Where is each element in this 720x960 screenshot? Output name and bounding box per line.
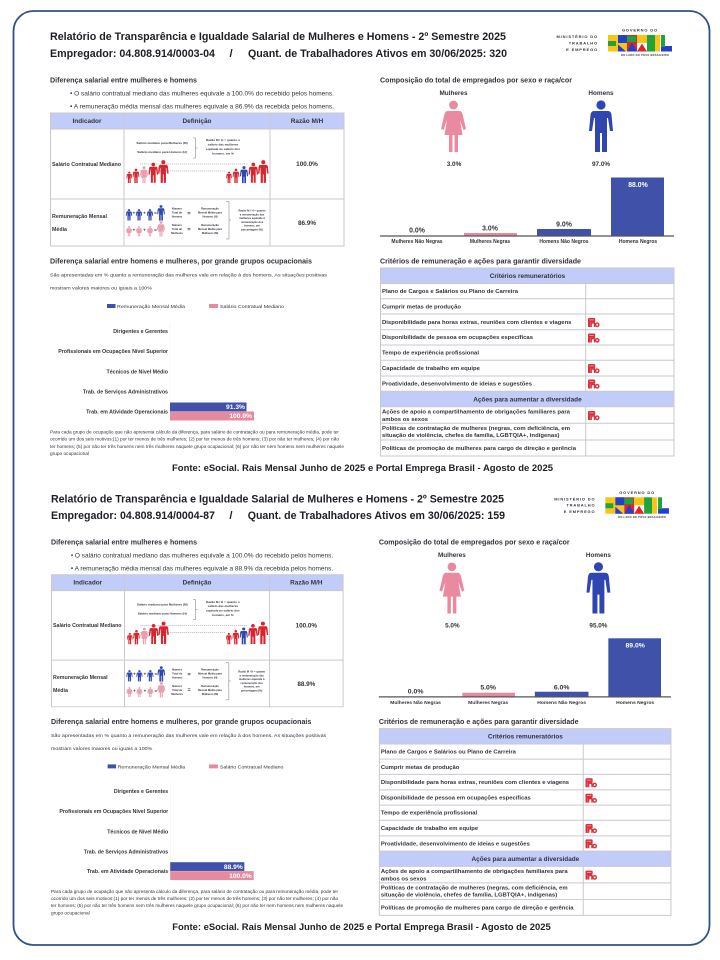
table: indicadores: Remuneração Mensal xyxy=(52,214,108,220)
logo: ministério e governo do brasil: MINISTÉRIO DO xyxy=(556,34,598,39)
pictogram: homens: Homens xyxy=(588,90,614,97)
table: critérios remuneratórios: Ações de apoio a compartilhamento de obrigações familiares para xyxy=(381,869,568,875)
legend xyxy=(107,304,284,309)
diagram: salário mediano: Salário mediano para Homens (H) xyxy=(137,150,187,154)
text block: explicação xyxy=(50,272,328,290)
diagram: remuneração média: a remuneração das xyxy=(240,673,264,677)
title: / xyxy=(230,48,234,60)
diagram: remuneração média: percentagem (%) xyxy=(241,688,263,692)
pictogram: homens: Homens xyxy=(586,552,611,559)
diagram: remuneração média: homens, em xyxy=(244,685,260,689)
bar chart: composição por raça: 0.0% xyxy=(408,688,423,695)
logo: ministério e governo do brasil: GOVERNO DO xyxy=(619,490,655,495)
icons: marcadores não xyxy=(586,778,596,880)
table: critérios remuneratórios: Capacidade de trabalho em equipe xyxy=(381,826,478,832)
table: critérios remuneratórios: Critérios remuneratórios xyxy=(488,734,563,741)
diagram: remuneração média: percentagem (%) xyxy=(241,228,263,232)
diagram: remuneração média: a remuneração das xyxy=(240,212,265,216)
diagram: remuneração média: = xyxy=(154,210,157,216)
diagram: remuneração média: Mensal Média para xyxy=(198,210,222,214)
bar chart: grupos ocupacionais xyxy=(59,782,254,880)
diagram: salário mediano: homens, em % xyxy=(212,613,234,617)
logo: ministério e governo do brasil: TRABALHO xyxy=(569,40,598,46)
table: critérios remuneratórios: Disponibilidade de pessoa em ocupações específicas xyxy=(381,795,531,801)
diagram: remuneração média xyxy=(126,202,266,239)
logo: ministério e governo do brasil: TRABALHO xyxy=(566,503,595,508)
heading: critérios: Critérios de remuneração e ações para garantir diversidade xyxy=(380,258,581,266)
table: indicadores: Indicador xyxy=(73,118,102,125)
table: critérios remuneratórios: Disponibilidade para horas extras, reuniões com clientes e viagens xyxy=(382,320,572,326)
table: indicadores: Salário Contratual Mediano xyxy=(53,623,122,629)
bar chart: composição por raça: Homens Não Negros xyxy=(539,239,589,245)
bar chart: composição por raça xyxy=(380,178,674,245)
text block: nota de rodapé: ter homens; (5) por não ter três homens nem três mulheres naquele grupo ocupacional; (6) por não ter nem homens nem mulheres naquele xyxy=(51,903,344,908)
table: critérios remuneratórios xyxy=(379,729,671,915)
heading: grupos ocupacionais: Diferença salarial entre homens e mulheres, por grande grupos ocupacionais xyxy=(51,719,311,726)
bar chart: composição por raça: Mulheres Negras xyxy=(470,239,510,245)
diagram: remuneração média: + xyxy=(133,672,136,677)
diagram: remuneração média: = xyxy=(187,227,191,233)
title xyxy=(51,493,505,522)
diagram: remuneração média: Mulheres (M) xyxy=(202,231,218,235)
table: indicadores: Razão M/H xyxy=(291,118,324,125)
table: critérios remuneratórios: situação de violência, chefes de família, LGBTQIA+, indígenas) xyxy=(381,892,557,898)
table: critérios remuneratórios: Proatividade, desenvolvimento de ideias e sugestões xyxy=(382,382,532,388)
bar chart: grupos ocupacionais: 100.0% xyxy=(229,873,252,880)
bar chart: composição por raça: 9.0% xyxy=(556,222,572,228)
diagram: remuneração média: = xyxy=(188,672,191,678)
diagram: remuneração média: + xyxy=(144,672,147,677)
title: Relatório de Transparência e Igualdade Salarial de Mulheres e Homens - 2º Semestre 2025 xyxy=(51,493,504,505)
diagram: remuneração média: Número xyxy=(172,668,183,672)
diagram: remuneração média: + xyxy=(144,688,147,693)
table: critérios remuneratórios: Políticas de promoção de mulheres para cargo de direção e gerência xyxy=(382,446,576,452)
logo: ministério e governo do brasil xyxy=(556,28,672,57)
diagram: remuneração média: = xyxy=(155,688,158,693)
bar chart: grupos ocupacionais: Trab. de Serviços Administrativos xyxy=(83,390,168,396)
diagram: remuneração média: Total de xyxy=(172,210,183,214)
pictogram: homens xyxy=(586,552,611,630)
text block: bullets: • O salário contratual mediano das mulheres equivale a 100.0% do recebido pelos homens. xyxy=(71,553,334,559)
source line: Fonte: eSocial. Rais Mensal Junho de 2025 e Portal Emprega Brasil - Agosto de 2025 xyxy=(172,463,553,473)
text block: nota de rodapé: ocorrido um dos seis motivos:(1) por ter menos de três mulheres; (2) por ter menos de três homens; (3) por não ter mulheres; (4) por não xyxy=(50,437,339,442)
table: indicadores: 88.9% xyxy=(297,681,316,688)
bar chart: grupos ocupacionais: Profissionais em Ocupações Nível Superior xyxy=(59,809,168,815)
bar chart: grupos ocupacionais: Dirigentes e Gerentes xyxy=(114,789,168,795)
report section: employer 0003-04 xyxy=(50,28,674,473)
legend: Remuneração Mensal Média xyxy=(118,764,186,769)
diagram: remuneração média: homens, em xyxy=(244,224,260,228)
logo: ministério e governo do brasil: DO LADO DO POVO BRASILEIRO xyxy=(621,53,669,57)
diagram: remuneração média: Razão M / H = quanto xyxy=(238,208,266,212)
table: indicadores: Salário Contratual Mediano xyxy=(52,162,122,168)
diagram: remuneração média: + xyxy=(133,228,136,232)
bar chart: grupos ocupacionais: Trab. em Atividade Operacionais xyxy=(86,410,168,416)
bar chart: grupos ocupacionais: 100.0% xyxy=(229,413,252,420)
table: critérios remuneratórios: Políticas de contratação de mulheres (negras, com deficiência, em xyxy=(382,426,570,432)
pictogram: mulheres xyxy=(438,552,466,630)
pictogram: mulheres xyxy=(439,90,468,168)
table: critérios remuneratórios: Capacidade de trabalho em equipe xyxy=(382,366,480,372)
title xyxy=(50,31,507,60)
bar chart: grupos ocupacionais xyxy=(58,322,254,420)
icons: marcadores não xyxy=(588,318,599,420)
logo: ministério e governo do brasil: GOVERNO DO xyxy=(622,28,658,32)
diagram: remuneração média: + xyxy=(143,210,146,216)
diagram: remuneração média: Total de xyxy=(172,688,183,692)
diagram: remuneração média: = xyxy=(154,228,157,232)
table: indicadores: 100.0% xyxy=(296,161,318,168)
bar chart: grupos ocupacionais: Dirigentes e Gerentes xyxy=(113,329,168,335)
text block: explicação: São apresentadas em % quanto a remuneração das mulheres vale em relação à dos homens. As situações positivas xyxy=(51,733,327,738)
table: critérios remuneratórios: Tempo de experiência profissional xyxy=(382,350,480,356)
table: critérios remuneratórios: Políticas de contratação de mulheres (negras, com deficiência, em xyxy=(381,886,568,892)
diagram: remuneração média: = xyxy=(188,688,191,694)
pictogram: mulheres: 3.0% xyxy=(447,161,462,168)
table: indicadores: Razão M/H xyxy=(290,580,323,587)
logo: ministério e governo do brasil: DO LADO DO POVO BRASILEIRO xyxy=(618,515,666,519)
table: critérios remuneratórios: Plano de Cargos e Salários ou Plano de Carreira xyxy=(381,749,516,755)
diagram: remuneração média: Razão M / H = quanto xyxy=(238,670,266,674)
bar chart: grupos ocupacionais: Técnicos de Nível Médio xyxy=(107,829,168,835)
heading: diferença salarial: Diferença salarial entre mulheres e homens xyxy=(51,539,197,546)
diagram: remuneração média: remuneração dos xyxy=(241,220,264,224)
text block: explicação: mostram valores maiores ou iguais a 100% xyxy=(50,286,152,290)
text block: explicação: mostram valores maiores ou iguais a 100% xyxy=(51,746,152,751)
diagram: remuneração média: Número xyxy=(172,206,182,210)
title: Quant. de Trabalhadores Ativos em 30/06/2025: 320 xyxy=(248,48,507,60)
diagram: remuneração média: = xyxy=(187,211,191,217)
table: critérios remuneratórios: Cumprir metas de produção xyxy=(382,304,462,310)
logo: ministério e governo do brasil: E EMPREGO xyxy=(566,47,598,52)
diagram: salário mediano: Salário mediano para Mulheres (M) xyxy=(136,141,188,145)
title: Quant. de Trabalhadores Ativos em 30/06/2025: 159 xyxy=(248,510,505,522)
table: critérios remuneratórios: ambos os sexos xyxy=(381,877,427,883)
diagram: remuneração média: Mulheres (M) xyxy=(202,692,218,696)
bar chart: grupos ocupacionais: Técnicos de Nível Médio xyxy=(106,370,169,376)
text block: bullets: • A remuneração média mensal das mulheres equivale a 88.9% da recebida pelos homens. xyxy=(71,566,334,572)
heading: diferença salarial: Diferença salarial entre mulheres e homens xyxy=(50,78,197,84)
table: indicadores: Remuneração Mensal xyxy=(53,675,108,681)
table: critérios remuneratórios: ambos os sexos xyxy=(382,417,428,423)
diagram: salário mediano: Salário mediano para Mulheres (M) xyxy=(137,603,188,607)
bar chart: composição por raça: 89.0% xyxy=(625,642,645,649)
text block: bullets xyxy=(70,92,334,110)
heading: grupos ocupacionais: Diferença salarial entre homens e mulheres, por grande grupos ocupacionais xyxy=(50,258,312,266)
diagram: remuneração média: Mensal Média para xyxy=(198,227,222,231)
table: indicadores: Definição xyxy=(183,580,212,587)
diagram: remuneração média: Mensal Média para xyxy=(198,688,222,692)
bar chart: composição por raça xyxy=(379,638,671,706)
diagram: remuneração média: + xyxy=(143,228,146,232)
diagram: remuneração média: Mensal Média para xyxy=(198,672,222,676)
pictogram: mulheres: Mulheres xyxy=(439,90,468,97)
diagram: remuneração média: Remuneração xyxy=(201,668,219,672)
legend: Salário Contratual Mediano xyxy=(220,304,284,309)
heading: composição: Composição do total de empregados por sexo e raça/cor xyxy=(380,78,572,84)
table: indicadores xyxy=(50,113,344,246)
diagram: salário mediano: equivale ao salário dos xyxy=(206,147,240,151)
text block: bullets: • O salário contratual mediano das mulheres equivale a 100.0% do recebido pelos homens. xyxy=(70,92,334,98)
text block: nota de rodapé: ter homens; (5) por não ter três homens nem três mulheres naquele grupo ocupacional; (6) por não ter nem homens nem mulheres naquele xyxy=(50,444,344,449)
diagram: remuneração média: Homens xyxy=(172,214,183,218)
diagram: salário mediano: salário das mulheres xyxy=(208,143,239,147)
bar chart: composição por raça: Homens Negros xyxy=(619,239,657,245)
text block: nota de rodapé xyxy=(51,889,344,916)
text block: bullets xyxy=(71,553,334,572)
text block: nota de rodapé: ocorrido um dos seis motivos:(1) por ter menos de três mulheres; (2) por ter menos de três homens; (3) por não ter mulheres; (4) por não xyxy=(51,896,339,901)
diagram: remuneração média: Remuneração xyxy=(201,223,219,227)
text block: nota de rodapé xyxy=(50,429,344,456)
legend: Remuneração Mensal Média xyxy=(117,304,185,309)
logo: ministério e governo do brasil: MINISTÉRIO DO xyxy=(554,496,595,501)
table: indicadores: 100.0% xyxy=(296,622,317,629)
table: critérios remuneratórios: Plano de Cargos e Salários ou Plano de Carreira xyxy=(382,289,518,295)
table: critérios remuneratórios: situação de violência, chefes de família, LGBTQIA+, indígenas) xyxy=(382,433,560,439)
text block: explicação: São apresentadas em % quanto a remuneração das mulheres vale em relação à dos homens. As situações positivas xyxy=(50,272,328,278)
diagram: remuneração média: Número xyxy=(172,684,183,688)
text block: explicação xyxy=(51,733,327,751)
bar chart: grupos ocupacionais: 88.9% xyxy=(224,864,243,871)
pictogram: mulheres: Mulheres xyxy=(438,552,466,559)
diagram: remuneração média: + xyxy=(133,688,136,693)
table: critérios remuneratórios: Ações para aumentar a diversidade xyxy=(472,856,580,863)
diagram: remuneração média: Mulheres xyxy=(171,231,183,235)
title: Empregador: 04.808.914/0003-04 xyxy=(50,48,216,60)
table: indicadores: Média xyxy=(53,688,68,694)
title: Empregador: 04.808.914/0004-87 xyxy=(51,510,215,522)
bar chart: grupos ocupacionais: Profissionais em Ocupações Nível Superior xyxy=(58,349,168,355)
pictogram: homens: 95.0% xyxy=(589,623,608,630)
table: indicadores: Definição xyxy=(183,118,212,125)
text block: nota de rodapé: Para cada grupo de ocupação que não apresenta cálculo da diferença, para salário de contratação ou para remuneração média, pode ter xyxy=(51,889,339,894)
table: critérios remuneratórios: Disponibilidade de pessoa em ocupações específicas xyxy=(382,335,533,341)
diagram: salário mediano: salário das mulheres xyxy=(208,604,238,608)
diagram: remuneração média: remuneração dos xyxy=(241,681,263,685)
table: critérios remuneratórios: Ações para aumentar a diversidade xyxy=(473,396,582,404)
bar chart: composição por raça: Mulheres Não Negras xyxy=(391,239,443,245)
table: indicadores: Indicador xyxy=(73,580,103,587)
table: critérios remuneratórios xyxy=(380,268,674,456)
table: indicadores: 86.9% xyxy=(298,220,316,227)
table: critérios remuneratórios: Tempo de experiência profissional xyxy=(381,811,478,817)
text block: nota de rodapé: Para cada grupo de ocupação que não apresenta cálculo da diferença, para salário de contratação ou para remuneração média, pode ter xyxy=(50,429,339,434)
bar chart: composição por raça: 5.0% xyxy=(480,684,496,691)
diagram: remuneração média: = xyxy=(155,672,158,677)
diagram: salário mediano: Razão M / H = quanto o xyxy=(206,600,240,604)
table: critérios remuneratórios: Ações de apoio a compartilhamento de obrigações familiares para xyxy=(382,410,570,416)
legend: Salário Contratual Mediano xyxy=(220,764,284,769)
logo: ministério e governo do brasil xyxy=(554,490,669,519)
diagram: remuneração média xyxy=(126,663,266,700)
diagram: remuneração média: Total de xyxy=(172,672,183,676)
table: critérios remuneratórios: Proatividade, desenvolvimento de ideias e sugestões xyxy=(381,841,530,847)
diagram: remuneração média: Homens (H) xyxy=(202,676,218,680)
diagram: salário mediano xyxy=(127,600,268,644)
diagram: remuneração média: mulheres equivale à xyxy=(239,677,265,681)
diagram: remuneração média: Homens xyxy=(172,676,183,680)
table: indicadores xyxy=(51,575,343,707)
table: critérios remuneratórios: Critérios remuneratórios xyxy=(490,273,566,280)
heading: critérios: Critérios de remuneração e ações para garantir diversidade xyxy=(379,719,579,726)
logo: ministério e governo do brasil: E EMPREGO xyxy=(564,509,595,514)
bar chart: composição por raça: 6.0% xyxy=(554,684,569,691)
diagram: remuneração média: Número xyxy=(172,223,182,227)
bar chart: composição por raça: 3.0% xyxy=(482,226,498,232)
diagram: remuneração média: Total de xyxy=(172,227,183,231)
bar chart: composição por raça: Homens Não Negros xyxy=(537,700,586,706)
pictogram: homens: 97.0% xyxy=(592,161,610,168)
title: / xyxy=(229,510,233,522)
diagram: remuneração média: mulheres equivale à xyxy=(239,216,265,220)
diagram: remuneração média: Homens (H) xyxy=(202,214,218,218)
diagram: remuneração média: Remuneração xyxy=(201,206,219,210)
text block: nota de rodapé: grupo ocupacional xyxy=(50,451,89,456)
diagram: remuneração média: Remuneração xyxy=(201,684,219,688)
diagram: salário mediano xyxy=(126,138,269,183)
diagram: remuneração média: Mulheres xyxy=(171,692,184,696)
bar chart: composição por raça: Mulheres Não Negras xyxy=(390,700,441,706)
pictogram: homens xyxy=(588,90,614,168)
diagram: salário mediano: Salário mediano para Homens (H) xyxy=(138,611,187,615)
text block: nota de rodapé: grupo ocupacional xyxy=(51,911,90,916)
text block: bullets: • A remuneração média mensal das mulheres equivale a 86.9% da recebida pelos homens. xyxy=(70,104,334,110)
bar chart: grupos ocupacionais: Trab. de Serviços Administrativos xyxy=(84,849,168,855)
diagram: salário mediano: Razão M / H = quanto o xyxy=(206,138,240,142)
table: critérios remuneratórios: Políticas de promoção de mulheres para cargo de direção e gerência xyxy=(381,905,574,911)
report section: employer 0004-87 xyxy=(51,490,671,932)
source line: Fonte: eSocial. Rais Mensal Junho de 2025 e Portal Emprega Brasil - Agosto de 2025 xyxy=(172,922,551,932)
heading: composição: Composição do total de empregados por sexo e raça/cor xyxy=(379,539,570,546)
bar chart: composição por raça: Mulheres Negras xyxy=(468,700,508,706)
table: critérios remuneratórios: Cumprir metas de produção xyxy=(381,765,459,771)
diagram: remuneração média: + xyxy=(133,210,136,216)
table: indicadores: Média xyxy=(52,227,67,233)
bar chart: composição por raça: 0.0% xyxy=(409,228,425,234)
pictogram: mulheres: 5.0% xyxy=(445,623,460,630)
diagram: salário mediano: homens, em % xyxy=(212,152,234,156)
table: critérios remuneratórios: Disponibilidade para horas extras, reuniões com clientes e viagens xyxy=(381,780,569,786)
bar chart: composição por raça: Homens Negros xyxy=(616,700,654,706)
bar chart: grupos ocupacionais: 91.3% xyxy=(226,404,245,411)
bar chart: composição por raça: 88.0% xyxy=(628,182,648,189)
legend xyxy=(108,764,284,769)
diagram: salário mediano: equivale ao salário dos xyxy=(206,609,240,613)
bar chart: grupos ocupacionais: Trab. em Atividade Operacionais xyxy=(87,869,168,875)
title: Relatório de Transparência e Igualdade Salarial de Mulheres e Homens - 2º Semestre 2025 xyxy=(50,31,507,43)
